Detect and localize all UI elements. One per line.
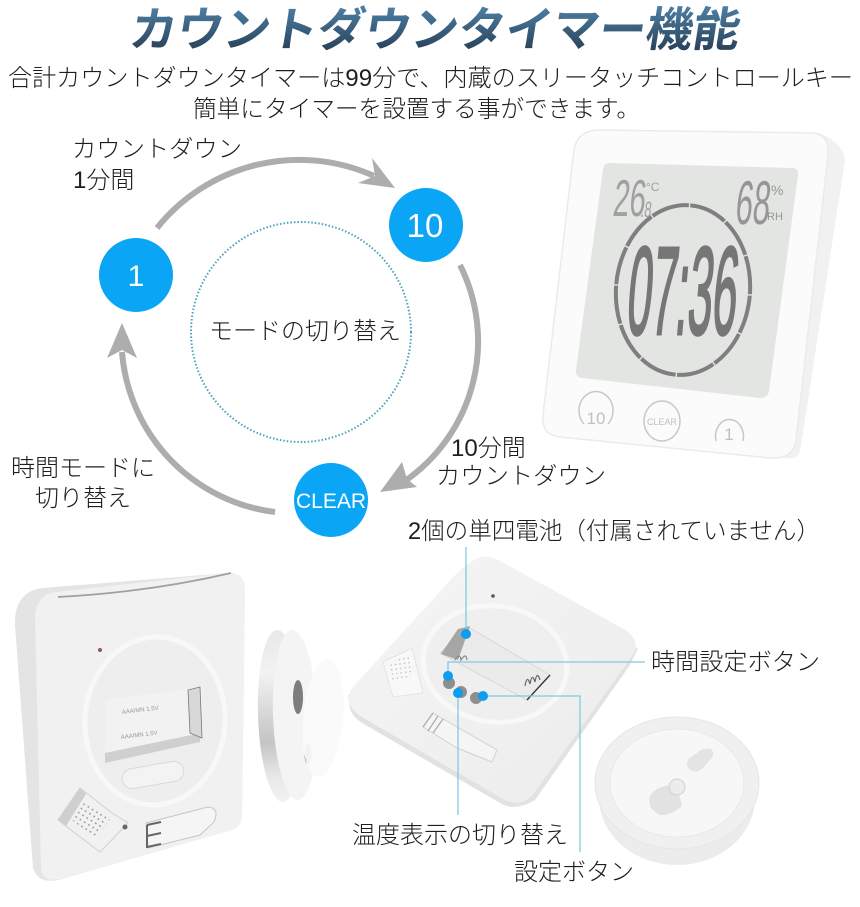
description text: [8, 65, 853, 123]
button clear: [644, 401, 680, 441]
base inner: [610, 729, 744, 837]
clock side: [785, 132, 845, 458]
label: time mode: [11, 455, 155, 512]
suction stud: [649, 785, 682, 815]
button 10: [579, 392, 613, 428]
description text: 合計カウントダウンタイマーは99分で、内蔵のスリータッチコントロールキー: [8, 65, 853, 92]
touch buttons: [579, 392, 744, 444]
battery recess: [79, 632, 231, 810]
callout lines: [448, 547, 645, 852]
left spring: [455, 656, 467, 660]
disc lower hole: [304, 744, 312, 764]
stand: [423, 713, 497, 762]
clock body: [543, 130, 828, 458]
description text: 簡単にタイマーを設置する事ができます。: [193, 96, 640, 123]
label: time setting button: 時間設定ボタン: [651, 649, 820, 676]
button clear: CLEAR: [647, 417, 678, 427]
battery bay: [105, 687, 202, 762]
humidity reading: %: [771, 182, 783, 198]
clock back view: [15, 573, 245, 881]
speaker holes: [72, 800, 110, 840]
arrow: 1 to 10: [157, 158, 395, 228]
button one: [716, 419, 744, 444]
right spring: [525, 675, 540, 686]
battery compartment: [440, 627, 550, 700]
back face: [35, 573, 245, 880]
battery label bottom: AAA/MN 1.5V: [121, 731, 158, 741]
callout labels: [352, 518, 820, 886]
title: カウントダウンタイマー機能: [126, 4, 744, 57]
line: batteries: [465, 547, 467, 634]
clock open back view: [348, 556, 638, 807]
disc rim: [255, 629, 305, 803]
temperature reading: °C: [646, 180, 660, 194]
keyhole slot: [687, 748, 713, 772]
label: 10 minutes: カウントダウン: [436, 463, 606, 490]
mode label: モードの切り替え: [209, 318, 401, 345]
battery contact: [441, 626, 470, 660]
battery contact: [188, 687, 202, 738]
line: temperature: [457, 693, 459, 815]
humidity reading: 68: [733, 169, 774, 238]
button 10: [389, 188, 463, 262]
button 1: 1: [128, 260, 144, 293]
arrow: 10 to clear: [380, 265, 478, 492]
base top rim: [595, 717, 759, 849]
label: setting button: 設定ボタン: [514, 859, 634, 886]
suction cup: [298, 657, 348, 779]
cycle diagram: [11, 136, 606, 537]
button 10: 10: [587, 409, 605, 428]
button slot: [121, 760, 185, 790]
button one: 1: [724, 425, 734, 444]
label: 10 minutes: 10分間: [451, 435, 526, 462]
disc hole: [293, 680, 303, 714]
base bottom: [599, 731, 755, 865]
suction base: [595, 717, 759, 865]
line: setting: [483, 696, 580, 852]
label: time mode: 切り替え: [35, 485, 131, 512]
label: 10 minutes: [436, 435, 606, 490]
speaker holes: [387, 654, 415, 683]
stand hook: [423, 713, 443, 733]
arrow: clear to 1: [107, 323, 275, 512]
line: time setting: [448, 662, 645, 675]
stand hook: [147, 822, 161, 848]
label: 1 minute: [72, 136, 242, 194]
button 1: [99, 238, 173, 312]
small holes: [98, 648, 102, 652]
open body: [349, 556, 636, 803]
clock front view: [543, 130, 845, 458]
temperature reading: 26: [611, 169, 649, 227]
label: 1 minute: 1分間: [73, 167, 134, 194]
small hole: [491, 594, 495, 598]
button 10: 10: [407, 207, 443, 244]
label: time mode: 時間モードに: [11, 455, 155, 482]
label: temperature toggle: 温度表示の切り替え: [352, 822, 568, 849]
speaker tab: [383, 648, 423, 697]
timer ring: [609, 199, 757, 381]
label: batteries: 2個の単四電池（付属されていません）: [408, 518, 820, 545]
time reading: 07:36: [623, 221, 744, 361]
lcd screen: [576, 163, 798, 398]
open body edge: [348, 648, 638, 807]
top slot: [58, 573, 231, 597]
speaker side: [58, 788, 86, 826]
button clear: [294, 463, 368, 537]
label: 1 minute: カウントダウン: [72, 136, 242, 163]
temperature reading: .8: [639, 198, 653, 222]
button clear: CLEAR: [296, 490, 366, 513]
callout dots: [443, 629, 488, 701]
battery opening: [416, 597, 574, 731]
back body: [15, 573, 245, 881]
grey buttons: [443, 677, 482, 704]
disc face: [270, 629, 320, 801]
battery label top: AAA/MN 1.5V: [122, 706, 159, 716]
mode dotted circle: [191, 222, 411, 442]
compartment edge: [527, 675, 550, 700]
stand: [146, 807, 216, 848]
suction disc side view: [255, 629, 348, 803]
speaker tab: [58, 788, 128, 852]
humidity reading: RH: [767, 211, 783, 223]
